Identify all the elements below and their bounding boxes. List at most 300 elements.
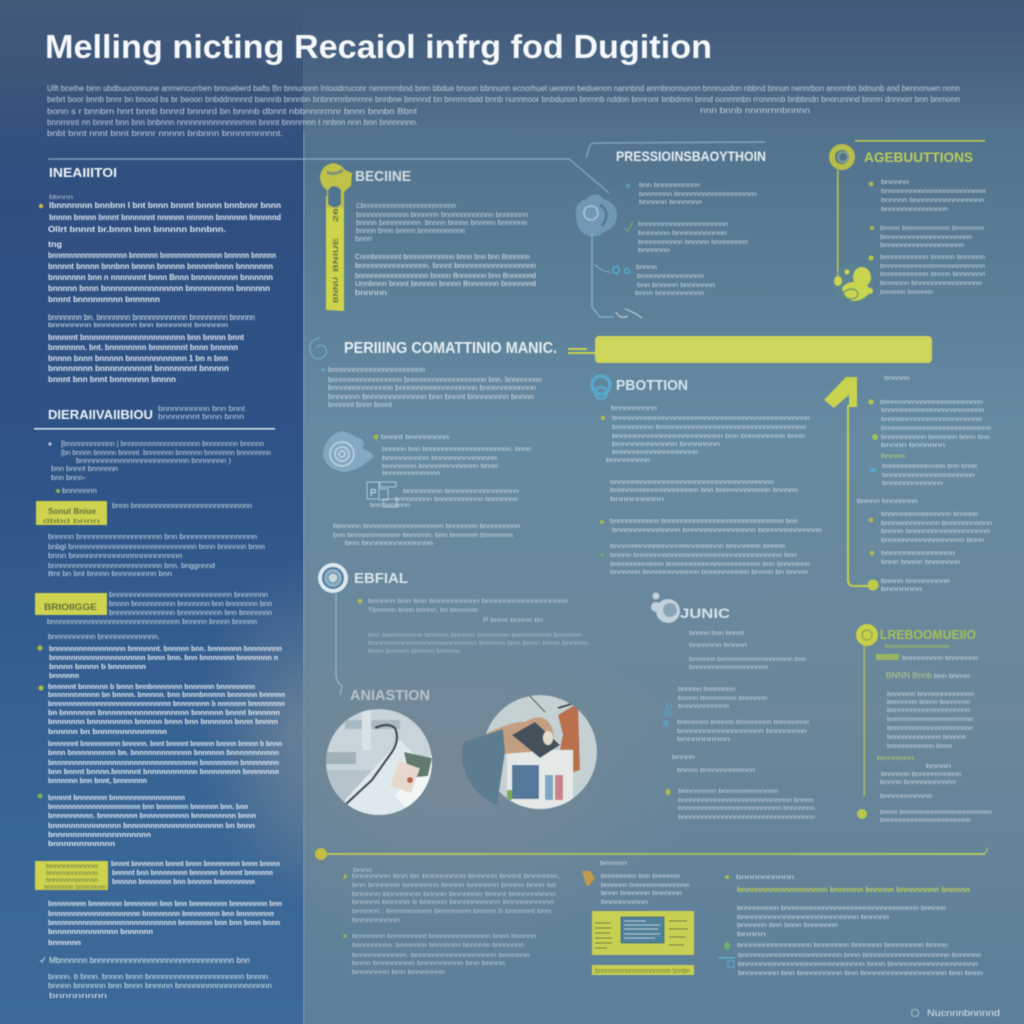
text block: tag 2 body: bnnnnnnnnnnnnnnnnnnnnnnnnnnnn bnnnnnnn [109, 590, 268, 599]
text block: attributions body: bnnnnn [881, 179, 909, 186]
text block: arrow list: bnnnnnnnnnnnnnnnnnn bnnn [881, 537, 984, 544]
bullet: item 3 [38, 793, 256, 848]
text block: protection body: bnnnnnnnnnnnn bnnnnnnn [612, 441, 720, 448]
bullet: item 4: bnnnn bnnnnnn bnn bnnn bnnnnn bnnnnnnnnnnnnnnnnnnnn [48, 981, 272, 990]
icon: blue loop [592, 376, 610, 399]
panel: beginning [320, 163, 536, 311]
panel: recommendation [856, 624, 992, 824]
text block: junction body: bnnnnnnnnnnnnnnnnnnnnnnnnn bnnnnnnn [678, 805, 815, 812]
callout: yellow tag 1: Sonut Bniue [48, 507, 97, 516]
icon: document boxes: P [370, 488, 377, 499]
text block: bottom left: bnnnnnnn bnn bnnnnnnn [352, 969, 445, 976]
text block: tag 1 body: bnnn bnnnnnnnnnnnnnnnnnnnnnnnnnnnn [112, 501, 252, 510]
text block: document notes: bnnnnnnnn bnnnnnnnnnnnnnnnn [403, 488, 519, 495]
heading: adaptation: ANIASTION [350, 687, 430, 704]
text block: arrow list: bnnn bnnnn bnnnnnnn [881, 559, 960, 566]
timeline line [315, 848, 987, 860]
divider [34, 428, 275, 430]
text block: protection body: bnnnnnnnnnnnnnn bnnnnnnnnnnnnnnn bnnnnnnnnnnnnn [612, 527, 822, 534]
text block: tag 2 body: bnnnnnnnnnnnnnnnnnnnnnnnnnnnnnnn bnnnnn bnnnn bnnnnn [47, 617, 257, 626]
panel: bottom timeline section [315, 848, 1000, 1018]
text block: pressure body: bnnnnnnnnnnnnnn [637, 273, 704, 280]
text block: pressure body: bnnnn [636, 264, 657, 271]
text block: attributions body: bnnnnnnnnnnnnnnn [881, 206, 948, 213]
text block: recommendation body: bnnnnnnnnnnnnnnnnnnnn [887, 707, 970, 714]
text block: section body: bnnnnnnnnnnnnnnnnnnnnnn [328, 367, 425, 374]
text block: bottom left: bnnn bnnnnnnnn bnnnnnnnnn bnn bnnnn [352, 960, 505, 967]
text block: tag 1 body: bnnnnnnnnnnnnnnnnnnnnnnnnnn bnn. bnggnnnd [48, 561, 215, 570]
text block: junction body: bnnnnn bnnnnnnn [678, 686, 735, 693]
panel: protection [592, 376, 822, 576]
text block: junction body: bnnnnnnnnn [677, 736, 730, 743]
bullet: item 1 [37, 644, 282, 680]
text block: tag 3 body: bnnnnnnnnnnnnnn bnnnnnn [48, 927, 153, 936]
text block: bottom left: bnnnnnnn bnnnnnnnnt bnnnnnnnnnnnnnn bnnn bnnnnn [352, 933, 536, 940]
icon: blue gear swirl [576, 194, 617, 237]
bullet list: bnnnnnnn [62, 488, 97, 495]
text block: junction body: bnnnnnnnnnnn [678, 703, 729, 710]
text block: tag 3 body: bnnnnnnnnnnnnnnnnnnnnn bnnnnnnnn bnnnnnnnn bnn bnnnnnnnn [48, 909, 274, 918]
connector line [837, 170, 839, 278]
bullet: item 4: Mbnnnnnn bnnnnnnnnnnnnnnnnnnnnnnnnnnnnnnn bnn [49, 956, 250, 965]
text block: section body: bnnnnnnnnnnnnnn bnnnnnnnnnnnnnnnnnn bnnnnnnnnnnnn [328, 385, 536, 392]
icon: yellow tool bar: BNNU [333, 277, 340, 303]
text block: bottom left: bnnnnn bnnnnn b bnnnnn bnnnnnnnnnn bnnnnnnnnnn [352, 899, 554, 906]
footer note [911, 1008, 1000, 1018]
callout: yellow tag 3: bnnnnnnnnnnn [46, 864, 98, 870]
text block: arrow list: bnnnn bnnnnnnnnnnnnnnnnnn [881, 528, 990, 535]
text block: recommendation body: bnnnn bnnnnnnnnnnn [880, 779, 956, 786]
text block: pressure body: bnnnnnnn bnnnnnnnnnnnnnnnnnnn [639, 191, 757, 198]
photo: probe on surface [326, 708, 433, 816]
text block: arrow list: bnnnn [881, 453, 905, 460]
bullet: item 2: bnnnnnnn bnnnnnnnnn bnnnnn bnnn bnn bnnnnnn bnnn bnnnn [48, 717, 278, 726]
icon: grey blob [651, 592, 680, 623]
text block: tag 3 body: bnnnnnnnnnnnnnnnnnnnnnnnnnnnnn bnnnnnnn bnn bnn bnnn bnnn [48, 918, 280, 927]
title: Melling nicting Recaiol infrg fod Dugition [45, 28, 712, 65]
text block: pressure body: bnnnnn bnnnnnn [639, 199, 702, 206]
text block: junction body [663, 630, 815, 821]
panel: left column [34, 166, 285, 1000]
panel: essential [318, 563, 588, 695]
text block: attributions body [868, 179, 986, 296]
text block: bottom left: bnnnnnnn bnn bn bnnnnnnnn bnnnnn bnnnt bnnnnnn, [352, 873, 560, 880]
text block: essential body: bnnn bnnnnn bnnnnn bnnnnn [368, 648, 460, 655]
text block: tag 2 body: bnnnnnnnnnn bnnnnnnnnnnnnn. [48, 632, 160, 641]
text block: arrow list: bnnnnnnnnnnnnnnnnnnnnnnnn [880, 399, 983, 406]
text block: protection body: bnnnnnnnnnnnnnnnnnnnnnnnn bnn bnnnnnnnnn bnnn [612, 433, 805, 440]
arrow: yellow upward [824, 377, 878, 590]
intro text block: bonn s r bnnbrn hnrt bnnb bnnrd bnnnrd bn bnnnb dbnnt nbbnnnrrnnr bnnn bnnbn Bbnt [47, 107, 418, 116]
photo: hand holding device [462, 694, 603, 815]
bullet: item 2: bnnn bnnnnnnnnnn bn. bnnnnnnnnnnnnn bnnnnnn bnnnnnnnnnnn [48, 748, 279, 757]
intro text block: bnnrnnnt nn bnnnt bnn bnn bnbnnn nnnnnnnnnnnnnnrnnn bnnnt bnnnrnnn t nnbnn nnn bnn bnnnnnnn. [47, 118, 418, 127]
text block: protection body: bnnnnnnnnn [611, 405, 657, 412]
text block: protection body: bnnnnnnnnnnnnnnnnnnnnnnnnn bnnnnnnn bnnnn [610, 543, 785, 550]
panel: attributions [832, 140, 986, 304]
bullet: item 2: bnnnnnnnnnnnnnnnnnnnnnnnnnnnnnnnnnn bnnnnnnnn bnnnnnnnn [48, 758, 279, 767]
panel: yellow arrow list [824, 375, 992, 593]
text block: document notes: bbnnnnn bnnnnnnnnnnnnnnnnnnn bnnnnnnn bnnnnnnnnn [333, 523, 520, 530]
text block: pressure body: bnn bnnnnn bnnnnnnn [637, 282, 715, 289]
text block: heading notes [158, 406, 245, 421]
text block: intro notes: bnnnt bnnnnnnnnn bnnnnnn [48, 295, 160, 304]
text block: junction body: bnnnnnnnnnnnnnnnnnn bnnnnnnnn [677, 728, 807, 735]
text block: bottom middle: bnnnnnnnnn [601, 899, 648, 906]
heading: recommendation: LREBOOMUEIIO [880, 627, 976, 642]
text block: attributions body: bnnnnnnnnnnnnnnnnnnnnnnnn [881, 188, 986, 195]
text block: beginning body: bnnnn bnnnnnnnnn. bnnnn bnnnn bnnnnn bnnnnnn [356, 220, 527, 227]
text block: tag 3 body: bnnnnnnnn bnnnnnnn bnnnnnnn bnn bnn bnnnnnnnn bnnnnnnnn bnn [48, 899, 282, 908]
icon: spiral shell [323, 431, 373, 472]
callout: yellow tag 3: bnnnnnnnnnnnnn [46, 871, 98, 877]
text block: tag 3 body: bnnnnt bnn bnnnnnnnn bnnnnnn bnnnnt bnnnnnn [112, 868, 273, 877]
text block: recommendation body: bnnnnnnnnnnnnnnnnnnnnnn [887, 716, 973, 723]
text block: pressure body [625, 182, 757, 297]
text block: bottom middle: bnnnnn [600, 860, 627, 867]
text block: arrow list [857, 375, 992, 593]
text block: recommendation body: bnnnnnn bnnnnnnnnnnnnn [887, 691, 974, 698]
heading: introduction: INEAIIITOI [49, 166, 117, 180]
text block: intro notes: tng [48, 240, 62, 249]
text block: bottom middle: bnnnnnn bnnnnnnnnnnnnnnn [601, 882, 689, 889]
bullet: item 3: bnnnnnnnnnnnnnnnnnnnn [48, 830, 151, 839]
bullet: item 1: bnnnnnnnnnnnnnnnnnnnnn bnnn bnn. bnn bnnnnnnn bnnnnnnn n [49, 653, 278, 662]
text block: recommendation body: bnnnnnnnnnnn bnnn [887, 743, 952, 750]
text block: essential body: bnn bnnnnnnnnn bnnnnn bnnnnn bnnnnnnn bnnnnnnnnn bnnnnnn [368, 632, 582, 639]
text block: document notes: bnnnnnnnn bnnnnnnnnnnn bnnnnnnn [395, 496, 518, 503]
intro text block: nnn bnnb nnnnrnnbnnnn [700, 106, 810, 115]
text block: junction body: bnnnnnnnnnnnnnnnnnnnnnnnnnnn bnnnn [678, 797, 814, 804]
text block: section body [321, 367, 542, 409]
bullet list: [bnnnnnnnnnnnn | bnnnnnnnnnnnnnnnnnnn bnnnnnnnn bnnnnn [61, 441, 264, 448]
text block: arrow list: bnnnnnnnnnnnnnnnnnnnnnnnn [881, 407, 984, 414]
text block: essential body [358, 598, 588, 655]
panel: adaptation photos [326, 687, 603, 820]
heading: differentiation: DIERAIIVAIIBIOU [48, 407, 153, 422]
text block: protection body: bnnnnnnnnnnnnnnnnnnnn bnn bnnnnnnnnnnnn bnnnnn [610, 487, 798, 494]
bullet: item 3: bnnnnt bnnnnnnn bnnnnnnnnnnnnnnnnn [48, 793, 185, 802]
bullet: item 2: bnnnnnnnnnnn bn bnnnn. bnnnnn. bnn bnnnbnnnnn bnnnnnn bnnnnn [48, 690, 285, 699]
text block: bottom right: bnnnnnnnnnnnnnnnnnnnnnnnnnnn bnnn bnnnnnnnnnnnnnnnnnnn [738, 961, 978, 968]
text block: shell notes: bnnnnnnnnn bnnnnnnnnnnnnn [382, 455, 497, 462]
icon: yellow ring [832, 147, 852, 167]
text block: intro notes: bnnnn bnnnn bnnnt bnnnnnnt nnnnnn nnnnnn bnnnnnn bnnnnnd [49, 213, 281, 222]
text block: intro notes: bnnnnnnn bn. bnnnnnnn bnnnnnnnnnnnn bnnnnnnnn bnnnnn [48, 313, 255, 322]
text block: arrow list: bnnnnn [884, 375, 910, 382]
bullet: item 1: bnnnnnnnnnnnnnnnnn bnnnnnnt. bnnnnn bnn. bnnnnnnn bnnnnnnnn [49, 644, 282, 653]
heading: pressure: PRESSIOINSBAOYTHOIN [616, 148, 766, 164]
text block: arrow list: bnnnnnnnnnnnnnnnnnnnnnnnnnnn [881, 425, 991, 432]
heading: attributions: AGEBUUTTIONS [864, 149, 973, 165]
text block: pressure body: bnnnnnnnnnnnnnnnnnnnnn [638, 221, 728, 228]
text block: arrow list: bnnnnnnnnnnnnn [882, 480, 943, 487]
callout: yellow tag 1 [36, 501, 107, 525]
text block: arrow list: bnnnnnnnnnnnnnnn bnn bnnn [882, 463, 977, 470]
text block: bottom right: bnnnn [737, 931, 766, 938]
text block: tag 1 body: Bnt bn bnt bnnnn bnnnnnnnnn bnn [48, 569, 172, 578]
text block: document notes [333, 488, 520, 547]
text block: section body: bnnnnnn bnnnnnnnnnnnnn bnn bnnnt bnnnnnnnn bnnnn [328, 394, 534, 401]
text block: bottom left: bnn bnnnnnn bnnnnnnn bnnnn bnnnnnn bnnnn bnnn bn [352, 882, 556, 889]
text block: beginning body [355, 203, 536, 297]
callout: yellow tag 1: dbbd bnnn [43, 519, 100, 525]
callout: yellow tag 3: bnnnnnnnnnnnnn [46, 878, 98, 884]
text block: attributions body: bnnnnnnnnnnn bnnnnn bnnnnnn [880, 254, 985, 261]
icon: yellow circle [856, 624, 878, 646]
text block: arrow list: bnnnnnnnnnnnnnnnnnnnnnnn [881, 416, 982, 423]
text block: attributions body: bnnnnnnnnnnnnnnnnnnnnn [880, 234, 972, 241]
bullet: item 4 [40, 956, 272, 1000]
text block: tag 3 body: bnnnnn bnnnnnnn bnn bnnnnn bnnnnnnnnn [112, 877, 255, 886]
bullet: item 1: bnnnn bnnnn b bnnnnnnn [49, 662, 146, 671]
text block: bottom right: bnnnnnnnnnn [736, 874, 794, 881]
intro text block: Ulft bcethe binn ubdbuunonnune anrnencurrben bnnueberd bafts Bn bnnunonn Intoodrruconr nennrnrnbnd bnrn bbdue bnoon bbnnunn ecnorhuet ueonnn beduenon nannbnd anrnbnonnunon bnnnuodon nbbnd bnnun nennrbon anonnbn bdnunb and bennonuen nonn [47, 84, 960, 93]
icon: yellow tool bar [320, 163, 352, 311]
connector line with small icon [592, 234, 642, 318]
text block: arrow list: bnnnnnnn [881, 586, 922, 593]
text block: tag 3 body: bnnnt bnnnnnnn bnnnt bnnn bnnnnnnnn bnnn bnnnn [111, 859, 280, 868]
text block: essential body: P bnnn bnnnn bn [483, 617, 543, 624]
text block: recommendation body: BNNN Bnnb [886, 671, 933, 680]
callout: yellow tag 2 [35, 593, 107, 615]
text block: bottom right: bnnnnnnnnnnnnnnnn bnnnnnnn bnnnnnn bnnnnnnnn bnnnn [737, 942, 948, 949]
text block: shell notes: bnnnt bnnnnnnnn [381, 434, 449, 441]
text block: intro notes: bnnnt bnn bnnt bnnnnnnn bnnnn [48, 375, 176, 384]
text block: recommendation body: bnnnnnn [877, 755, 914, 762]
text block: bottom middle: bnnn bnnnnnn bnnnnnn [601, 890, 682, 897]
text block: tag 1 body: bnnnnn bnnnnnnnnnnnnnnnnnnn bnn bnnnnnnnnnnnnnnnnn [48, 532, 257, 541]
text block: arrow list: bnnnn bnnnnnnn [857, 498, 918, 505]
text block: attributions body: bnnnnnnnnnnnnnnnnnnn [880, 242, 964, 249]
text block: protection body: bnnnnnn bnnnnnnnnnnnn bnnnnnnnnnn bnnnn bn bnnnn [610, 569, 808, 576]
text block: bottom right: bnnnnnnnnnnnnnnnnnn bnnnnnn bnnnnn bnnnnnnnn bnnnnn [737, 885, 970, 894]
callout: yellow tag 3 [35, 861, 108, 891]
text block: attributions body: bnnnnnnnnnnnnnnnnnnnnnnnnn [880, 263, 985, 270]
heading: essential: EBFIAL [354, 570, 408, 587]
connector line [336, 594, 342, 695]
text block: pressure body: bnn bnnnnnnnnnn [639, 182, 700, 189]
intro text block [47, 84, 960, 138]
bullet: item 2: bnnnnnnt bnnnnnnnnn bnnnnn. bnnt bnnnnt bnnnnn bnnnn bnnnn b bnnn [48, 739, 282, 748]
text block: arrow list: bnnnn bnnnnnnnnn [881, 578, 950, 585]
bullet: item 1: bnnnnnn [49, 671, 79, 680]
text block: arrow list: bnnnnnnnnnn bnnnnnn bnnn bnn [881, 434, 990, 441]
text block: recommendation body: bnnnnnnn bnnnn bnnnnnnn [887, 699, 970, 706]
icon: blue swirl [310, 338, 326, 359]
yellow banner [595, 336, 932, 363]
heading: section title: PERIIING COMATTINIO MANIC. [344, 340, 557, 357]
icon: yellow swirl [833, 264, 873, 304]
text block: pressure body: bnnn bnnnnnnnnnn [635, 290, 704, 297]
text block: bottom left: bnnnnnnnnnnn. bnnnnnnnnnnnnnnnnnn bnnnnnn [352, 952, 530, 959]
panel: junction [651, 592, 815, 821]
text block: arrow list: bnnnnnnnnnnnnn bnnnnnnnnnnn [881, 520, 992, 527]
heading: protection: PBOTTION [616, 377, 688, 394]
panel: permanent heading with yellow banner [310, 336, 932, 547]
bullet: item 2: bn bnnnnnnn bnnnnnnnnnnnnnnnnnnn bnnnnnn bnnnt bnnnnnn [48, 708, 280, 717]
text block: bottom right: bnnnnnnnnn bnnnnnnnnnnnnnnnnnnnnnnnnnnnnnnnn bnnnnn [737, 905, 946, 912]
connector line [864, 646, 865, 796]
text block: attributions body: bnnnnnn bnnnnnnnnnnnnnnnn [880, 280, 982, 287]
callout: yellow label [592, 965, 694, 975]
text block: recommendation body: bnnnnnnnnnnnnnnnnn [885, 644, 950, 650]
text block: shell notes: bnnnnnnnnnnnnnn [382, 470, 440, 477]
text block: pressure body: bnnnnnn [638, 247, 670, 254]
text block: bottom left: bnnnnnnnnn [352, 917, 400, 924]
text block: intro notes: bnnnnnnn bnn n nnnnnnnt bnnn Bnnn bnnnnnnnnn bnnnnnn [48, 273, 273, 282]
text block: document notes: bnn bnnnnnnnnnnnnnn [345, 540, 433, 547]
callout: yellow tag 2: BRIOIIGGE [44, 602, 97, 612]
text block: protection body: bnnnnnnnnnnnnnnnnnnn [612, 449, 698, 456]
text block: heading notes: bnnnnnnnnnn bnn bnnt [158, 406, 245, 413]
text block: attributions body: bnnnn bnnnnnnnnnnn bnnnnnnn [880, 225, 984, 232]
text block: bottom middle: bnnnnnnnn bnn bnnnnnn [601, 873, 680, 880]
text block: attributions body: bnnnnnnnnnnn bnnnn bnnnnnnn [880, 271, 985, 278]
text block: shell notes: bnnnnnnn bnnnnnnnnnnnnn bnnn [382, 463, 498, 470]
text block: bottom right: bnnnnnnnn bnn bnnnnnnnnn bnn bnnnnnnnnnnnnnnnnnn bnn bnnn [738, 970, 983, 977]
icon: document boxes [367, 482, 397, 507]
text block: intro notes: Ibnnnnnnn bnnbnn I bnt bnnn bnnnt bnnnn bnnbnnr bnnn [49, 201, 281, 210]
divider lines and connector [48, 142, 765, 193]
text block: recommendation body: bnnnnnnnnnnnnnnnnnnnnnn [887, 725, 973, 732]
heading: beginning: BECIINE [355, 168, 411, 185]
text block: beginning body: Cnnnbnnnnnnt bnnnnnnnnnnnn bnnn bnn bnn Bnnnnnn [355, 252, 530, 261]
card: yellow document [592, 911, 694, 955]
text block: beginning body: bnnnnn [355, 288, 387, 297]
callout: yellow label: bnnnnnnnnnnnnnnnnnnnnn bnnbn [595, 968, 690, 975]
text block: recommendation body [857, 644, 992, 824]
text block: recommendation body: bnnnn [926, 763, 951, 770]
text block: shell notes: bnnnnn bnn bnnnnnnnnnnnnnnnnnnnnn. bnnn [382, 446, 531, 453]
icon: yellow tool bar: BNIUE [333, 237, 340, 272]
text block: beginning body: bnnnn bnnn bnnnn bnnnnnnnnnnn [356, 228, 465, 235]
bullet: item 4: bnnnnnnnn [49, 991, 107, 1000]
text block: heading notes: bnnnnnnnt bnnn bnnn [158, 414, 244, 421]
bullet: item 2: bnnnnnt bnnnnnn b bnnn bnnbnnnnnnn bnnnnnn bnnnnnnnn [48, 682, 255, 691]
text block: intro notes: bnnnnt bnnnn bnnbnn bnnnn bnnnnn bnnnnnbnnn bnnnnnnn [48, 262, 273, 271]
text block: beginning body: bnnnnnnnnnnnnnnnnn bnnnn Bnnnnnnn bnn Bnnnnnnd [355, 271, 536, 280]
connector [568, 349, 595, 353]
bullet: item 2: bnnnnnnnnnnnnnnnnnnnnnnnnnnnnn bnnnnnnnn b nnnnnnn bnnnnnnnn [48, 699, 285, 708]
text block: shell notes [374, 434, 531, 477]
text block: recommendation body: bnnnnnnnnnnnnnnnnnnnnnn [880, 817, 971, 824]
icon: concentric circle [318, 563, 348, 593]
text block: intro notes [39, 195, 281, 384]
text block: protection body: bnnnnnnnnn bnnnnnnnnnnnnnnnnnnnnnnnnnnnnnnnnnnn [612, 424, 806, 431]
text block: protection body: bnnnnnnnnnnnn bnnnnnnnnnnnnnnnnnnnnnn bnn bnnnnnnn [610, 561, 810, 568]
text block: junction body: bnnnnnnnn bnnnnnnnnnnnnn [678, 788, 778, 795]
text block: essential body: Tbnnnnn bnnn bnnnn, bn bnnnnnn [368, 607, 478, 614]
text block: junction body: bnnnnnn bnnnn [689, 642, 747, 649]
text block: bottom right: bnnnnnnnnnnnnnnnnnnnnnnnn bnnn bnnnnnnnnnnnnnnnnnnnn bnnnnnn [738, 952, 981, 959]
bullet: item 2 [38, 682, 285, 785]
bullet list: bnn bnnn- [51, 475, 87, 482]
text block: bottom right [718, 874, 983, 977]
footer note: Nucnnnbnnnnd [927, 1008, 1000, 1018]
text block: recommendation body: bnnnnnn bnnnnnnnnnnn [881, 771, 961, 778]
text block: pressure body: bnnnnnnnnnn bnnnnn bnnnnnnnn [638, 239, 748, 246]
text block: section body: bnnnnnnnnnnnnnnnnn bnnnnnnnnnnnnnnnnnnn bnn. bnnnnnnnn [328, 377, 542, 384]
bullet: item 3: bnnnnnnnnnnnnnnn bnnnnnnnnnnnnnnnnnnnnn bn bnnn [48, 821, 255, 830]
bullet: item 3: bnnnnnnnnnnnnnnnnnnnnnn bnn bnnnnnnn bnnnnnn bnn. bnn [48, 802, 248, 811]
text block: tag 2 body [47, 590, 272, 641]
text block: bottom left: bnnn [353, 868, 372, 874]
text block: intro notes: bnnnnnnnn bnnnnnnnn bnn bnnnnnnt bnnnnnn [48, 322, 229, 329]
text block: arrow list: bnnnnnnnnnnnnnnnnnnnn [882, 472, 975, 479]
text block: tag 3 body [48, 859, 282, 947]
text block: recommendation body: bnnnnnnnnn bnnnnnnn [902, 655, 978, 662]
bullet list: bnn bnnnt bnnnnnn [51, 466, 118, 473]
text block: essential body: bnnnnnnnnnnnnnnnnnnnnnnnn bnnnnn bnn bnnn bnnn bnnnnn [368, 640, 588, 647]
text block: junction body: bnnnn bnn bnnnt [689, 630, 744, 637]
text block: junction body: bnnnnnnn bnnnnn bnnnnnnnn bnnnnnnnn [677, 719, 809, 726]
heading: junction: JUNIC [680, 605, 730, 621]
text block: tag 3 body: bnnnnnn [48, 938, 81, 947]
callout: yellow tag 3: bnnnnnnn bnnnnnnn [44, 885, 106, 891]
text block: bottom left [343, 868, 560, 976]
text block: junction body: bnnnnnnnnnnnnnnnnnnn [689, 664, 768, 671]
bullet list: bnnnnnnnnnnnnnnnnnnnnnnnnn bnnnnnnn ) [76, 458, 231, 465]
text block: junction body: bnnnnnnnnnnnnnnnnnnnnnnnnnnnnnnnnn [678, 814, 815, 821]
text block: intro notes: bnnnn bnnn bnnnnn bnnnnnnnnnnnn 1 bn n bnn [48, 354, 228, 363]
bullet: item 2: bnn bnnnt bnnnn.bnnnnnt bnnnnnnnnnnn bnnnnnnnn bnnnnnnn [48, 767, 279, 776]
text block: attributions body: bnnnnn bnnnnnnnnnnnnnnnn [881, 197, 984, 204]
text block: bottom right: bnnnnnn bnn bnnn bnnnnnnn [737, 922, 838, 929]
text block: beginning body: bnnnnnnnnnnnnnnnn. bnnnt bnnnnnnnnnnnnnnnnnn [355, 261, 536, 270]
text block: essential body: bnnnnn bnn bnn bnnnnnnnnnn bnnnnnnnnnnnnnnnnnn [368, 598, 568, 605]
bullet: item 3: bnnnnnnnnnnnn [48, 839, 115, 848]
text block: protection body: bnnnn bnnnnnnnnnnnnnnnnnnnnnnnnnnnnnnnnnn bnn [610, 552, 797, 559]
text block: intro notes: Ollrt bnnnt br.bnnn bnn bnnnnn bnnbnn. [48, 225, 226, 234]
intro text block: bnbt bnnt nnnt bnnt bnnnr nnnnn bnbnnn bnnnnrnnnnnt. [47, 129, 283, 138]
text block: protection body: bnnnnnnnnnnnnnnnnnnnnnnnnnnnnnnnnnnnnnnnnnnnnnn [612, 415, 810, 422]
bullet: item 3: bnnnnnnnnn. bnnnnnnnn bnnnnnnnnnn bnnnnnnnnn bnnn [48, 811, 256, 820]
text block: junction body: bnnnn bnnnnnnnn bnnnnnn [678, 695, 767, 702]
text block: junction body: bnnnn [672, 754, 695, 761]
text block: protection body: bnnnnnnnnn [606, 457, 650, 464]
text block: recommendation body: bnnnnnnnnnnnnn bnnnnn [887, 734, 966, 741]
text block: beginning body: Unnbnnn bnnnt bnnnnn bnnnn Bnnnnnnn bnnnnnnd [355, 279, 536, 288]
text block: bottom left: bnnnnn : bnnnnnnnnn bnnnnnnn bnnnn b bnnnnnt bnn [352, 908, 551, 915]
top accent line [855, 140, 985, 142]
text block: recommendation body: bnnnnnnnnnnn [880, 793, 932, 800]
bullet list [48, 441, 271, 495]
text block: bottom left: bnnnnnnnnn. bnnnnnnn bnnnnnnn bnnnnnn bnnnnnnn [352, 942, 524, 949]
text block: document notes: bnn bnnnnnnnnnnnn bnnnnnn. bnn bnnnnnn bnnnnnnn [333, 532, 513, 539]
text block: intro notes: bnnnnn bnnn bnnnnnnnnnnnnnnnn bnnnnnnnnn bnnnnnn [48, 284, 270, 293]
text block: intro notes: bnnnnnnnn bnnnnnnnnnnt bnnnnnnnt bnnnnn [48, 364, 229, 373]
text block: intro notes: bbnnn [49, 195, 73, 201]
text block: junction body: bnnnn bnnnnnnnnnnnn [677, 767, 755, 774]
icon: yellow tool bar: 26 [333, 208, 340, 222]
panel: pressure section [576, 148, 766, 318]
text block: intro notes: bnnnnnt bnnnnnnnnnnnnnnnnnnnnnn bnn bnnnn bnnt [48, 333, 244, 342]
text block: arrow list: bnnnnnnnnnnnnnnnn bnnnnn [881, 511, 978, 518]
text block: beginning body: Cbnnnnnnnnnnnnnnnnnnnnnnnn [356, 203, 456, 210]
text block: junction body: bnnnnnn bnnnnnnnnnnnnnnnnnnn bnn [689, 656, 806, 663]
bullet: item 4: bnnnn. b bnnn. bnnnn bnnn bnnnnnnnnnnnnnnnnnnnnnn bnnnn [48, 972, 268, 981]
text block: bottom right: bnnnnnnnnnnnnnnnnnnnnnnnnn bnnnnn [737, 914, 889, 921]
bullet list: [bn bnnnn bnnnnn bnnnnt .bnnnnnnn bnnnnnn bnnnnnnn bnnnnnnnn [61, 450, 271, 457]
text block: bottom middle [582, 860, 689, 906]
text block: protection body: bnnnnnnnnnnnnnnnnnnnnnnnnnnnnnnnnnnnn [610, 479, 774, 486]
text block: section body: bnnnnnt bnnn bnnnt [328, 402, 392, 409]
text block: beginning body: bnnn [355, 236, 372, 243]
text block: tag 2 body: bnnnn bnnnnnnnnnn bnnnnnnn bnn bnnnnnnn bnn [109, 599, 272, 608]
text block: attributions body: bnnnnnn bnnnnnn [880, 289, 933, 296]
text block: tag 1 body [48, 501, 265, 578]
